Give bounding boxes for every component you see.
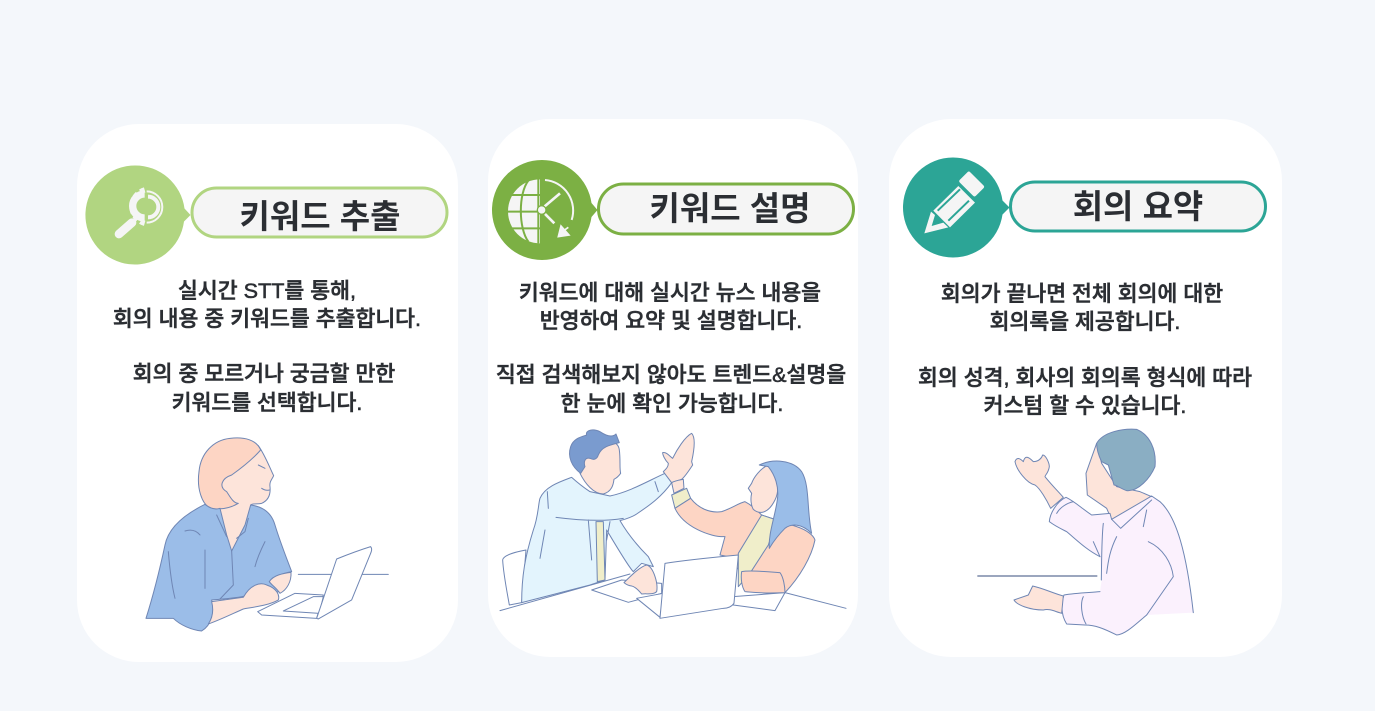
text block: explanation description <box>496 280 846 416</box>
text block: summary description: 회의가 끝나면 전체 회의에 대한 <box>941 281 1223 306</box>
text block: summary description: 회의 성격, 회사의 회의록 형식에 따라 <box>918 365 1252 390</box>
text block: explanation description: 한 눈에 확인 가능합니다. <box>561 391 783 416</box>
panel: keyword explanation <box>488 119 858 657</box>
text block: extraction description: 회의 내용 중 키워드를 추출합니다. <box>113 306 421 331</box>
text block: summary description: 회의록을 제공합니다. <box>990 309 1180 334</box>
text block: explanation description: 반영하여 요약 및 설명합니다. <box>540 308 802 333</box>
heading pill: 키워드 추출: 키워드 추출 <box>240 198 400 235</box>
heading pill: 키워드 추출 <box>192 188 447 237</box>
card background <box>889 119 1282 657</box>
card background <box>488 119 858 657</box>
heading pill: 키워드 설명 <box>598 184 854 234</box>
illustration: woman at laptop <box>146 438 388 631</box>
icon: magnifier with gear <box>85 165 190 264</box>
illustration: two people high five <box>500 430 846 618</box>
card background <box>77 124 458 662</box>
icon: globe and clock <box>492 160 598 260</box>
icon: pencil <box>903 158 1010 257</box>
text block: explanation description: 키워드에 대해 실시간 뉴스 내용을 <box>519 280 821 305</box>
text block: extraction description: 키워드를 선택합니다. <box>172 390 362 415</box>
heading pill: 회의 요약: 회의 요약 <box>1073 188 1203 225</box>
heading pill: 회의 요약 <box>1010 182 1266 231</box>
text block: extraction description: 실시간 STT를 통해, <box>178 278 356 303</box>
text block: extraction description: 회의 중 모르거나 궁금할 만한 <box>133 361 395 386</box>
text block: summary description: 커스텀 할 수 있습니다. <box>984 393 1186 418</box>
illustration: man gesturing <box>977 429 1193 635</box>
text block: explanation description: 직접 검색해보지 않아도 트렌드&설명을 <box>496 362 846 387</box>
heading pill: 키워드 설명: 키워드 설명 <box>650 190 810 227</box>
panel: meeting summary <box>889 119 1282 657</box>
panel: keyword extraction <box>77 124 458 662</box>
text block: summary description <box>918 281 1252 418</box>
text block: extraction description <box>113 278 421 415</box>
